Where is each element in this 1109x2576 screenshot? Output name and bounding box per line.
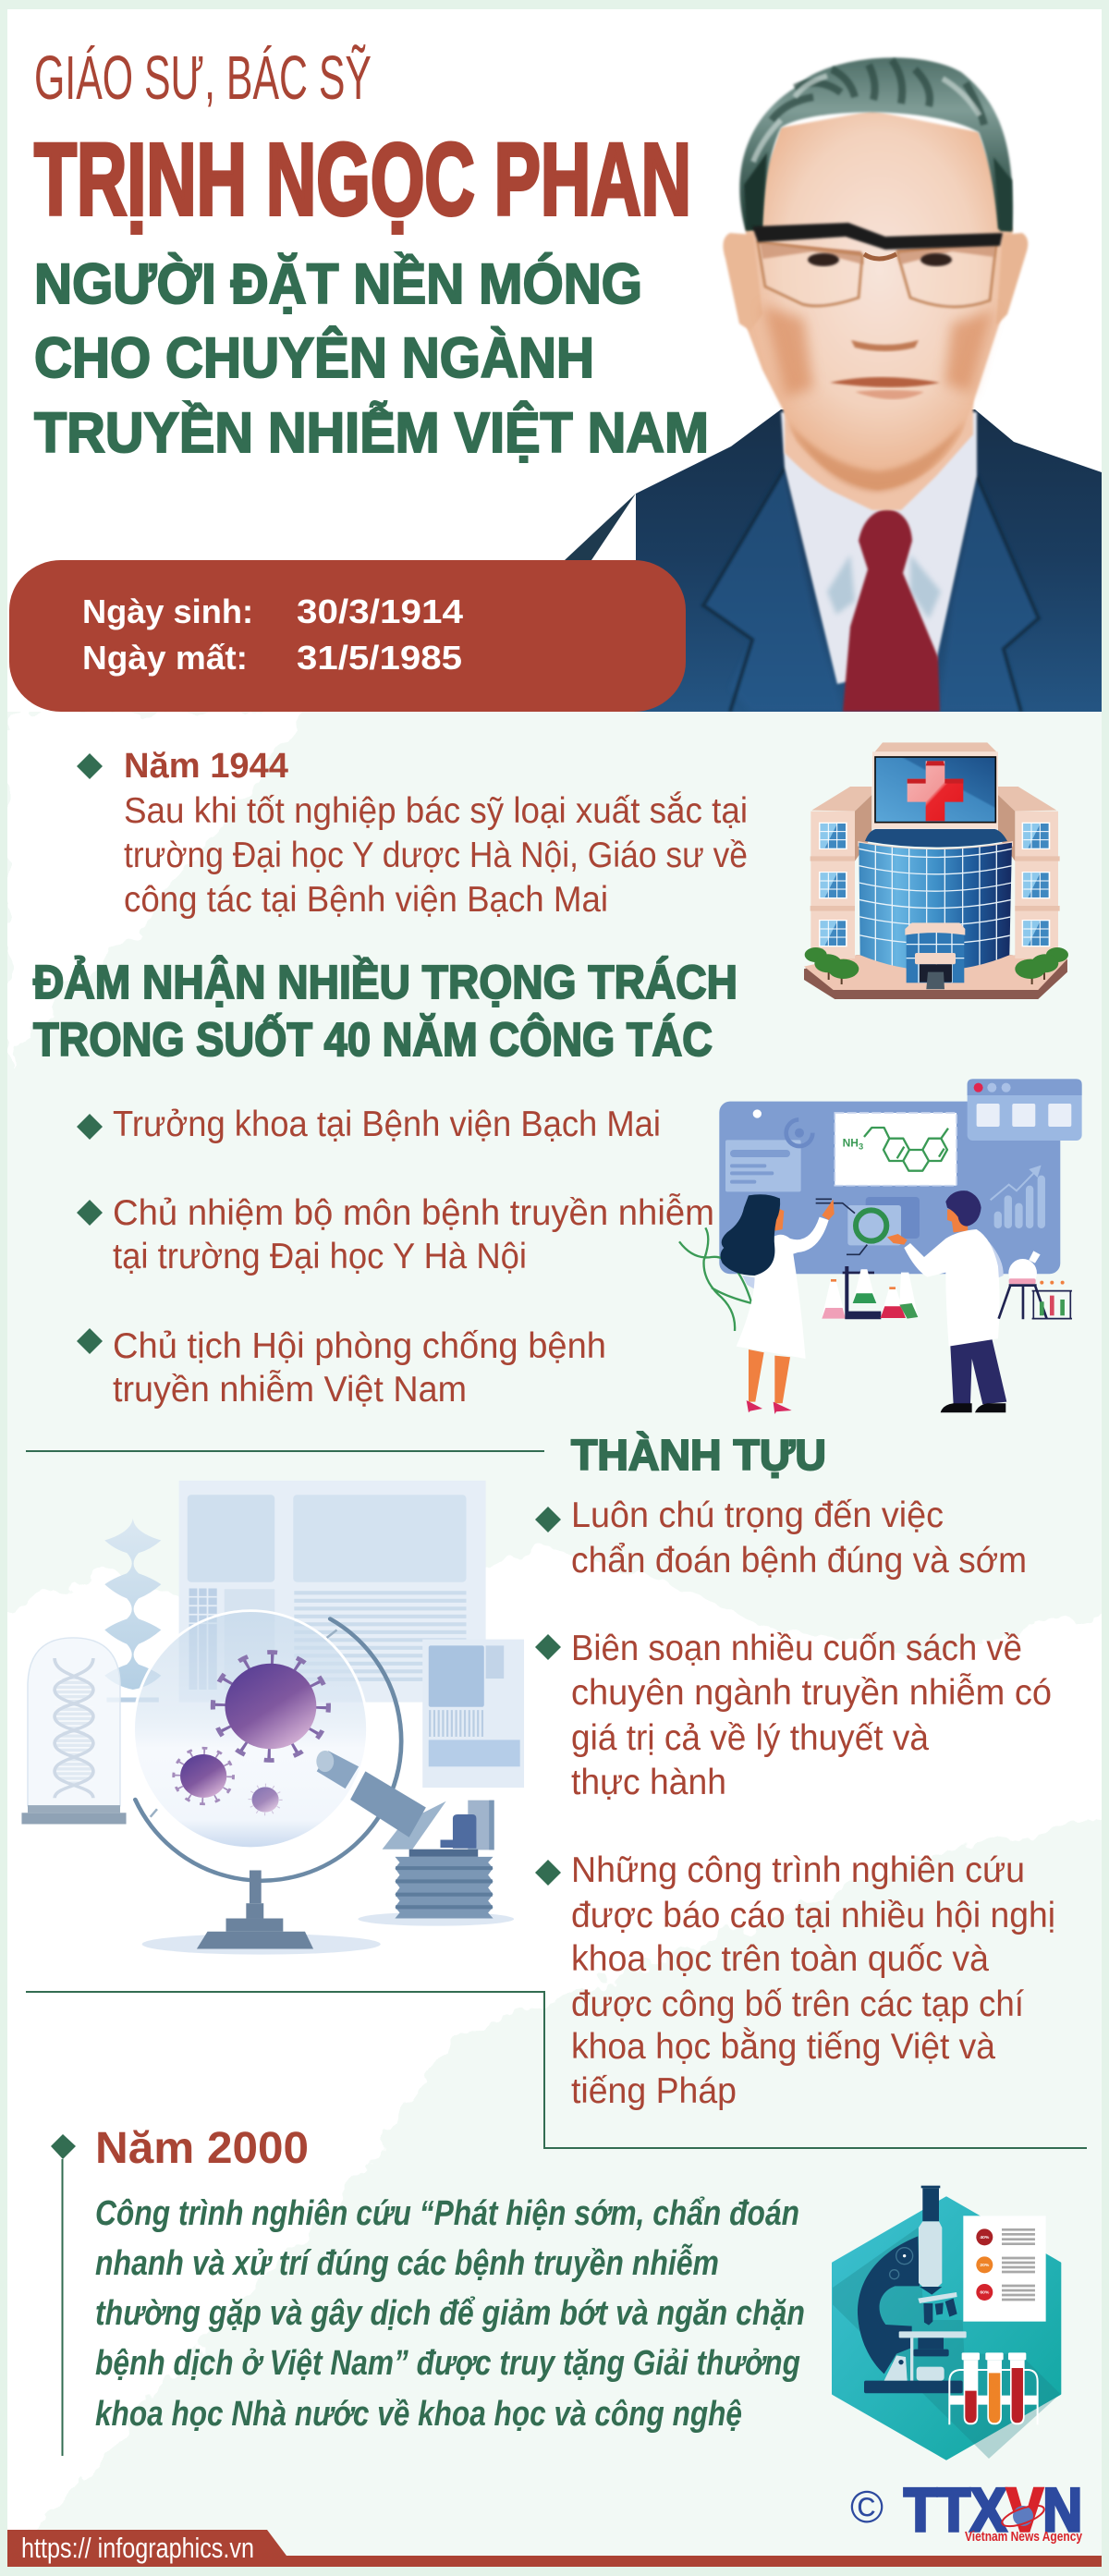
bridge — [864, 254, 896, 259]
bullet list: achievements: thực hành — [571, 1763, 726, 1802]
report sheet: 60% — [980, 2290, 990, 2296]
globe stand — [197, 1871, 313, 1948]
microscope — [316, 1751, 494, 1919]
dates pill: Ngày mất: — [82, 639, 248, 677]
medium virus — [174, 1748, 234, 1804]
collar shadows — [827, 555, 941, 619]
arm dials — [890, 2248, 913, 2279]
dates pill: Ngày sinh: — [82, 592, 253, 630]
entrance — [905, 922, 965, 989]
bullet list: achievements: giá trị cả về lý thuyết và — [571, 1718, 929, 1758]
bullet list: responsibilities: Chủ tịch Hội phòng chống bệnh — [113, 1326, 606, 1366]
face — [746, 111, 1013, 490]
eyes — [808, 253, 952, 266]
right wing — [998, 787, 1060, 958]
molecule card — [835, 1113, 957, 1186]
back of jacket — [565, 494, 636, 712]
block: year 1944: Năm 1944 — [124, 747, 288, 786]
dates pill: 30/3/1914 — [297, 592, 463, 630]
large backdrop screen — [179, 1481, 486, 1703]
bullet list: responsibilities: Trưởng khoa tại Bệnh viện Bạch Mai — [113, 1105, 661, 1144]
bullet list: responsibilities: Chủ nhiệm bộ môn bệnh truyền nhiễm — [113, 1193, 714, 1233]
base shadows — [142, 1912, 514, 1955]
right ear — [996, 233, 1028, 325]
shirt — [781, 412, 977, 684]
report sheet — [963, 2216, 1046, 2322]
block: year 2000 — [51, 2124, 805, 2456]
globe lens — [134, 1611, 368, 1849]
title — [34, 43, 709, 464]
board — [719, 1102, 1060, 1274]
microscope tube — [918, 2186, 957, 2326]
chart — [991, 1166, 1045, 1228]
logo letters: TTXVN — [904, 2475, 1082, 2544]
jacket — [636, 409, 1102, 712]
woman scientist — [721, 1194, 835, 1414]
bullet list: achievements: chuyên ngành truyền nhiễm có — [571, 1673, 1052, 1713]
portrait photograph — [565, 57, 1102, 712]
block: year 1944: trường Đại học Y dược Hà Nội, Giáo sư về — [124, 836, 748, 875]
hair highlights — [753, 76, 980, 162]
lapel left edge — [703, 468, 785, 712]
agency name: Vietnam News Agency — [965, 2529, 1083, 2545]
long shadow — [833, 2228, 1060, 2459]
left trees — [805, 947, 859, 984]
billboard — [872, 742, 998, 829]
footer bar with URL — [7, 2530, 1102, 2567]
block: year 2000: bệnh dịch ở Việt Nam” được truy tặng Giải thưởng — [95, 2344, 800, 2383]
hair streaks — [772, 60, 984, 125]
heading: achievements: THÀNH TỰU — [571, 1431, 826, 1479]
heading: responsibilities: TRONG SUỐT 40 NĂM CÔNG TÁC — [33, 1012, 713, 1066]
bell jar with DNA — [21, 1638, 127, 1825]
vase column — [104, 1519, 161, 1703]
right trees — [1015, 947, 1068, 984]
browser window — [968, 1079, 1082, 1141]
bullet list: achievements: khoa học bằng tiếng Việt và — [571, 2027, 995, 2067]
small backdrop panel — [422, 1640, 524, 1788]
glasses lenses — [758, 242, 996, 307]
tie — [843, 508, 940, 712]
jaw shading — [786, 421, 966, 492]
mouth — [830, 377, 940, 387]
icon: microscope hexagon — [833, 2186, 1060, 2460]
copyright mark: © — [850, 2483, 884, 2533]
bullet list: achievements: tiếng Pháp — [571, 2071, 737, 2111]
bullet list: achievements: được báo cáo tại nhiều hội nghị — [571, 1896, 1055, 1935]
logo: TTXVN — [850, 2475, 1083, 2545]
lapel left — [706, 471, 832, 693]
bullet list: responsibilities — [77, 1105, 714, 1410]
dates pill: 31/5/1985 — [297, 639, 462, 677]
title line: subtitle — [34, 252, 709, 464]
report sheet: 40% — [980, 2235, 990, 2240]
hexagon — [833, 2197, 1060, 2460]
dark hair right side — [993, 157, 1012, 231]
footer bar with URL: https:// infographics.vn — [21, 2532, 254, 2564]
dates pill — [9, 560, 686, 712]
report sheet: 20% — [980, 2263, 990, 2268]
lower lip — [855, 390, 924, 399]
large virus — [213, 1653, 328, 1760]
title line: name: TRỊNH NGỌC PHAN — [34, 123, 691, 237]
bullet list: achievements: Biên soạn nhiều cuốn sách về — [571, 1629, 1022, 1668]
illustration: scientists at board — [679, 1079, 1082, 1414]
awning — [865, 829, 1007, 848]
title line: subtitle: CHO CHUYÊN NGÀNH — [34, 326, 594, 389]
arc connectors — [151, 1630, 337, 1817]
small virus — [250, 1785, 281, 1814]
bullet list: achievements: khoa học trên toàn quốc và — [571, 1939, 989, 1979]
platform — [804, 955, 1067, 999]
title line: role: GIÁO SƯ, BÁC SỸ — [34, 43, 372, 113]
bullet list: achievements: chẩn đoán bệnh đúng và sớm — [571, 1541, 1027, 1581]
bullet list: achievements: Những công trình nghiên cứu — [571, 1850, 1025, 1890]
microscope arm — [858, 2236, 920, 2374]
lapel right — [946, 481, 1036, 693]
bullet list: achievements: được công bố trên các tạp chí — [571, 1984, 1024, 2024]
bullet list: responsibilities: truyền nhiễm Việt Nam — [113, 1370, 467, 1410]
test tubes — [949, 2352, 1038, 2424]
bullet list: achievements — [535, 1496, 1055, 2111]
block: year 2000: Năm 2000 — [95, 2124, 309, 2173]
bullet list: achievements: Luôn chú trọng đến việc — [571, 1496, 944, 1535]
left info card — [725, 1140, 801, 1191]
block: year 2000: thường gặp và gây dịch để giảm bớt và ngăn chặn — [95, 2294, 805, 2333]
bullet list: responsibilities: tại trường Đại học Y Hà Nội — [113, 1237, 527, 1276]
block: year 2000: nhanh và xử trí đúng các bệnh truyền nhiễm — [95, 2242, 719, 2283]
right lab glassware — [999, 1251, 1072, 1319]
nose — [851, 340, 919, 351]
molecule card: 3 — [859, 1141, 863, 1151]
target ring — [753, 1109, 812, 1146]
block: year 1944 — [77, 747, 748, 920]
block: year 2000: Công trình nghiên cứu “Phát hiện sớm, chẩn đoán — [95, 2194, 799, 2233]
heading: responsibilities: ĐẢM NHẬN NHIỀU TRỌNG TRÁCH — [33, 955, 737, 1008]
globe meridian arc — [135, 1619, 401, 1881]
title line: subtitle: TRUYỀN NHIỄM VIỆT NAM — [34, 401, 709, 464]
icon: hospital — [804, 742, 1068, 999]
left ear — [723, 233, 762, 331]
block: year 2000: khoa học Nhà nước về khoa học và công nghệ — [95, 2395, 742, 2434]
logo globe — [1000, 2501, 1046, 2531]
drum — [858, 841, 1013, 969]
microscope stage and base — [864, 2331, 967, 2393]
molecule card: NH — [843, 1137, 859, 1150]
glasses brow bar — [752, 223, 1003, 250]
dark hair left side — [744, 153, 767, 229]
heading: responsibilities — [33, 955, 737, 1066]
block: year 1944: Sau khi tốt nghiệp bác sỹ loại xuất sắc tại — [124, 791, 748, 831]
neck — [785, 397, 973, 510]
title line: subtitle: NGƯỜI ĐẶT NỀN MÓNG — [34, 252, 642, 315]
left lab glassware — [822, 1266, 918, 1319]
block: year 1944: công tác tại Bệnh viện Bạch Mai — [124, 880, 608, 920]
cheek shading — [762, 305, 993, 397]
centre panels — [816, 1197, 920, 1254]
man scientist — [887, 1190, 1006, 1412]
brown shadow under glasses bar — [760, 242, 996, 264]
illustration: virus under globe lens — [21, 1481, 524, 1955]
hair — [739, 57, 1013, 231]
DNA strand — [679, 1227, 751, 1331]
lapel right edge — [977, 476, 1039, 712]
left wing — [810, 787, 871, 958]
